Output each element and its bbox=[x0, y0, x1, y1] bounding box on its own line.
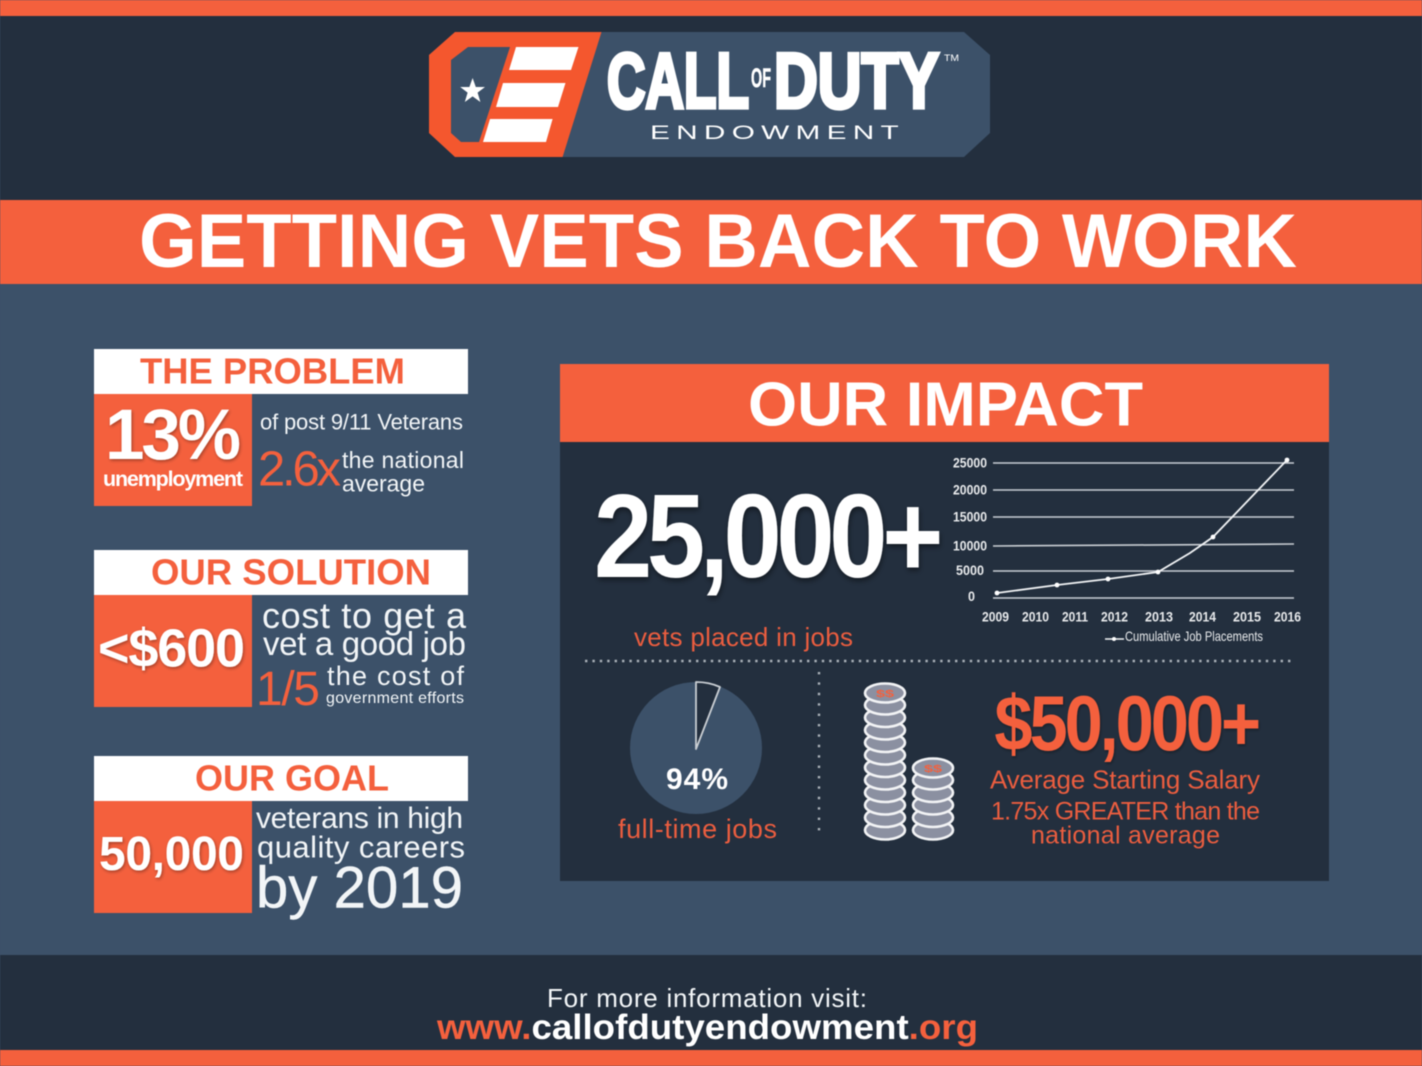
pie chart: 94% full-time jobs: 94% bbox=[666, 763, 728, 796]
line chart: cumulative job placements: 10000 bbox=[953, 538, 987, 554]
panel: the problem: the national bbox=[342, 447, 464, 473]
main background panel bbox=[0, 284, 1422, 955]
panel: our goal: veterans in high bbox=[256, 802, 463, 835]
pie chart: 94% full-time jobs bbox=[618, 682, 777, 844]
footer bbox=[0, 955, 1422, 1066]
line chart: cumulative job placements: Cumulative Job Placements bbox=[1125, 628, 1263, 644]
footer: www.callofdutyendowment .org bbox=[436, 1008, 978, 1047]
stat: vets placed: vets placed in jobs bbox=[634, 622, 853, 652]
header band bbox=[0, 0, 1422, 200]
stat: starting salary bbox=[990, 679, 1261, 850]
stat: starting salary: $50,000+ bbox=[994, 679, 1261, 767]
panel: our solution: government efforts bbox=[326, 690, 464, 707]
panel: our solution: 1/5 bbox=[256, 663, 320, 716]
logo: Call of Duty Endowment: CALL bbox=[607, 36, 749, 124]
panel: the problem: of post 9/11 Veterans bbox=[260, 410, 463, 434]
panel: our goal: OUR GOAL bbox=[195, 758, 389, 798]
logo: Call of Duty Endowment bbox=[429, 32, 990, 157]
line chart: cumulative job placements: 0 bbox=[968, 588, 975, 604]
panel: our solution: OUR SOLUTION bbox=[151, 552, 431, 592]
title banner: GETTING VETS BACK TO WORK bbox=[139, 199, 1297, 284]
panel: our goal bbox=[94, 756, 468, 920]
panel: the problem: 13% bbox=[105, 396, 241, 475]
line chart: cumulative job placements bbox=[953, 454, 1301, 644]
logo: Call of Duty Endowment: OF bbox=[751, 63, 771, 93]
line chart: cumulative job placements: 2009 bbox=[982, 608, 1009, 624]
pie chart: 94% full-time jobs: full-time jobs bbox=[618, 814, 777, 844]
stat: vets placed: 25,000+ bbox=[594, 470, 943, 602]
line chart: cumulative job placements: 2013 bbox=[1145, 608, 1173, 624]
line chart: cumulative job placements: 2014 bbox=[1189, 608, 1216, 624]
panel: the problem: THE PROBLEM bbox=[140, 350, 405, 392]
line chart: cumulative job placements: 2016 bbox=[1274, 608, 1301, 624]
icon: coin stacks bbox=[865, 684, 953, 840]
logo: Call of Duty Endowment: TM bbox=[944, 53, 959, 63]
panel: the problem bbox=[94, 349, 468, 506]
icon: coin stacks: $$ bbox=[876, 689, 895, 700]
heading: our impact: OUR IMPACT bbox=[748, 370, 1143, 440]
stat: starting salary: Average Starting Salary bbox=[990, 764, 1260, 794]
stat: starting salary: 1.75x GREATER than the bbox=[991, 798, 1260, 826]
line chart: cumulative job placements: 15000 bbox=[953, 508, 987, 524]
line chart: cumulative job placements: 25000 bbox=[953, 454, 987, 470]
line chart: cumulative job placements: 2012 bbox=[1101, 608, 1128, 624]
line chart: cumulative job placements: 2015 bbox=[1233, 608, 1261, 624]
panel: our goal: by 2019 bbox=[256, 856, 463, 920]
panel: our solution: <$600 bbox=[98, 618, 245, 678]
panel: our solution: vet a good job bbox=[263, 625, 466, 662]
line chart: cumulative job placements: 5000 bbox=[956, 562, 984, 578]
panel: our goal: 50,000 bbox=[99, 828, 244, 881]
footer: For more information visit: bbox=[547, 983, 867, 1013]
logo: Call of Duty Endowment: DUTY bbox=[774, 36, 939, 124]
panel: our solution: the cost of bbox=[327, 661, 464, 691]
panel: the problem: unemployment bbox=[103, 467, 243, 491]
icon: coin stacks: $$ bbox=[924, 764, 943, 775]
panel: the problem: average bbox=[342, 470, 425, 496]
panel: our impact bbox=[560, 364, 1329, 881]
panel: our solution bbox=[94, 550, 468, 716]
line chart: cumulative job placements: 20000 bbox=[953, 482, 987, 498]
panel: the problem: 2.6x bbox=[258, 442, 341, 496]
stat: starting salary: national average bbox=[1031, 822, 1220, 850]
logo: Call of Duty Endowment: ENDOWMENT bbox=[650, 123, 905, 144]
line chart: cumulative job placements: 2011 bbox=[1062, 608, 1088, 624]
panel: our solution: cost to get a bbox=[262, 595, 467, 636]
panel: our goal: quality careers bbox=[257, 830, 465, 864]
line chart: cumulative job placements: 2010 bbox=[1022, 608, 1049, 624]
